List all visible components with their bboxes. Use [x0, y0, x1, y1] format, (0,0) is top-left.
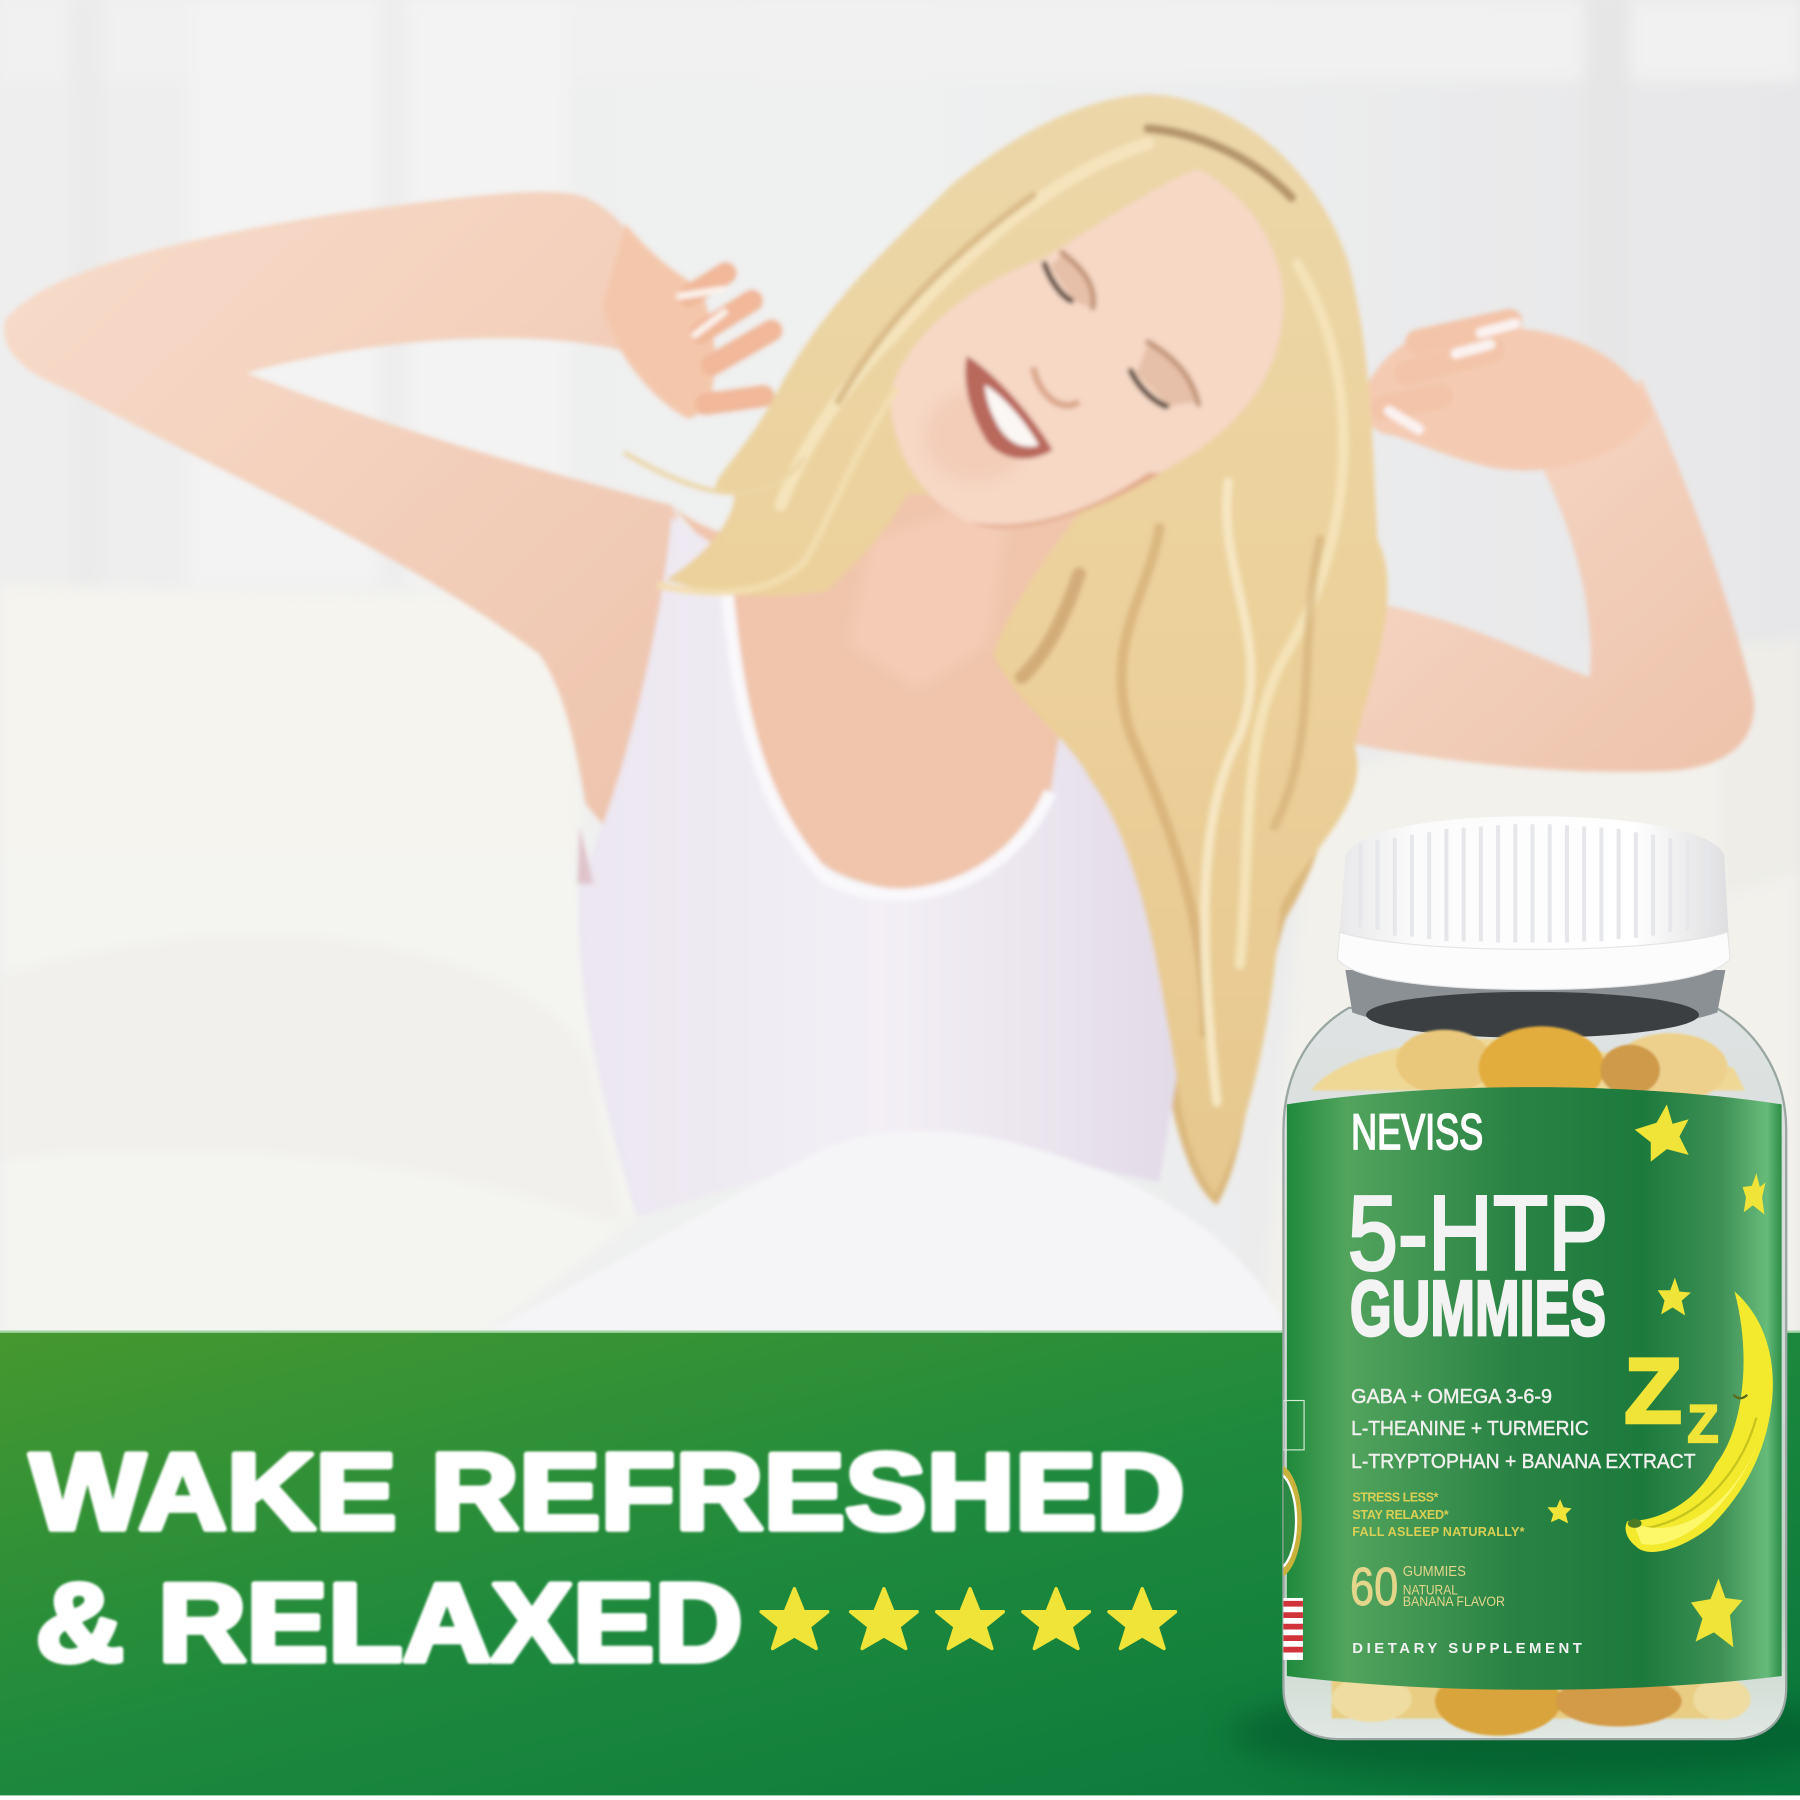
teeth: [985, 385, 1039, 447]
count and flavor: 60: [1350, 1557, 1398, 1617]
nose shadow: [1033, 367, 1079, 405]
benefits list: STRESS LESS*: [1352, 1491, 1438, 1505]
sleepy Zz letters: Z: [1688, 1395, 1718, 1454]
brand name: NEVISS: [1351, 1103, 1483, 1160]
product subtitle: GUMMIES: [1350, 1264, 1606, 1352]
left hand with fingers: [603, 224, 771, 419]
USA flag on label edge: [1283, 1598, 1303, 1660]
count and flavor: BANANA FLAVOR: [1403, 1594, 1505, 1609]
green banner: [0, 1330, 1800, 1795]
dark neck: [1345, 970, 1725, 1035]
headline: wake refreshed and relaxed: [30, 1431, 1185, 1685]
woman's left arm (viewer left): [4, 192, 735, 872]
label stars: [1547, 1104, 1766, 1647]
smiling mouth: [965, 356, 1053, 459]
ingredient list: L-THEANINE + TURMERIC: [1351, 1417, 1589, 1440]
headline: wake refreshed and relaxed: WAKE REFRESHED: [30, 1431, 1185, 1553]
hair strands: [626, 129, 1343, 1102]
sleepy Zz letters: [1624, 1340, 1718, 1454]
white cap: [1337, 816, 1730, 990]
long blonde hair: [666, 94, 1388, 1194]
product title: 5-HTP: [1348, 1175, 1608, 1293]
ingredient list: [1351, 1385, 1696, 1473]
five star rating: [761, 1589, 1176, 1648]
dietary supplement line: DIETARY SUPPLEMENT: [1352, 1640, 1582, 1657]
benefits list: [1352, 1491, 1525, 1539]
white tank top: [579, 517, 1182, 1217]
supplement bottle: [1251, 816, 1786, 1739]
bottle glass body: [1283, 1008, 1786, 1739]
benefits list: STAY RELAXED*: [1352, 1508, 1449, 1522]
gummies at bottom: [1330, 1680, 1752, 1738]
chest and neck: [672, 459, 1148, 891]
photo background: bedroom wall and pillows: [0, 0, 1800, 1337]
woman stretching in bed: [4, 94, 1754, 1337]
ingredient list: L-TRYPTOPHAN + BANANA EXTRACT: [1351, 1450, 1696, 1473]
sleeping banana moon: [1626, 1291, 1773, 1552]
headline: wake refreshed and relaxed: & RELAXED: [36, 1560, 743, 1685]
quality seal on label edge: [1284, 1400, 1305, 1576]
woman's right arm (viewer right): [1309, 379, 1754, 772]
hair behind shoulders: [987, 643, 1333, 1205]
face: [891, 169, 1284, 525]
count and flavor: NATURAL: [1403, 1583, 1458, 1598]
benefits list: FALL ASLEEP NATURALLY*: [1352, 1525, 1525, 1539]
count and flavor: [1350, 1557, 1505, 1617]
sleepy Zz letters: Z: [1624, 1340, 1682, 1442]
green label: [1287, 1087, 1782, 1690]
hand on the right: [1359, 321, 1653, 471]
eyes closed with makeup: [1045, 253, 1198, 406]
count and flavor: GUMMIES: [1403, 1563, 1466, 1580]
gummies at top: [1311, 1026, 1745, 1109]
ingredient list: GABA + OMEGA 3-6-9: [1351, 1385, 1552, 1408]
white blanket: [488, 1131, 1291, 1337]
